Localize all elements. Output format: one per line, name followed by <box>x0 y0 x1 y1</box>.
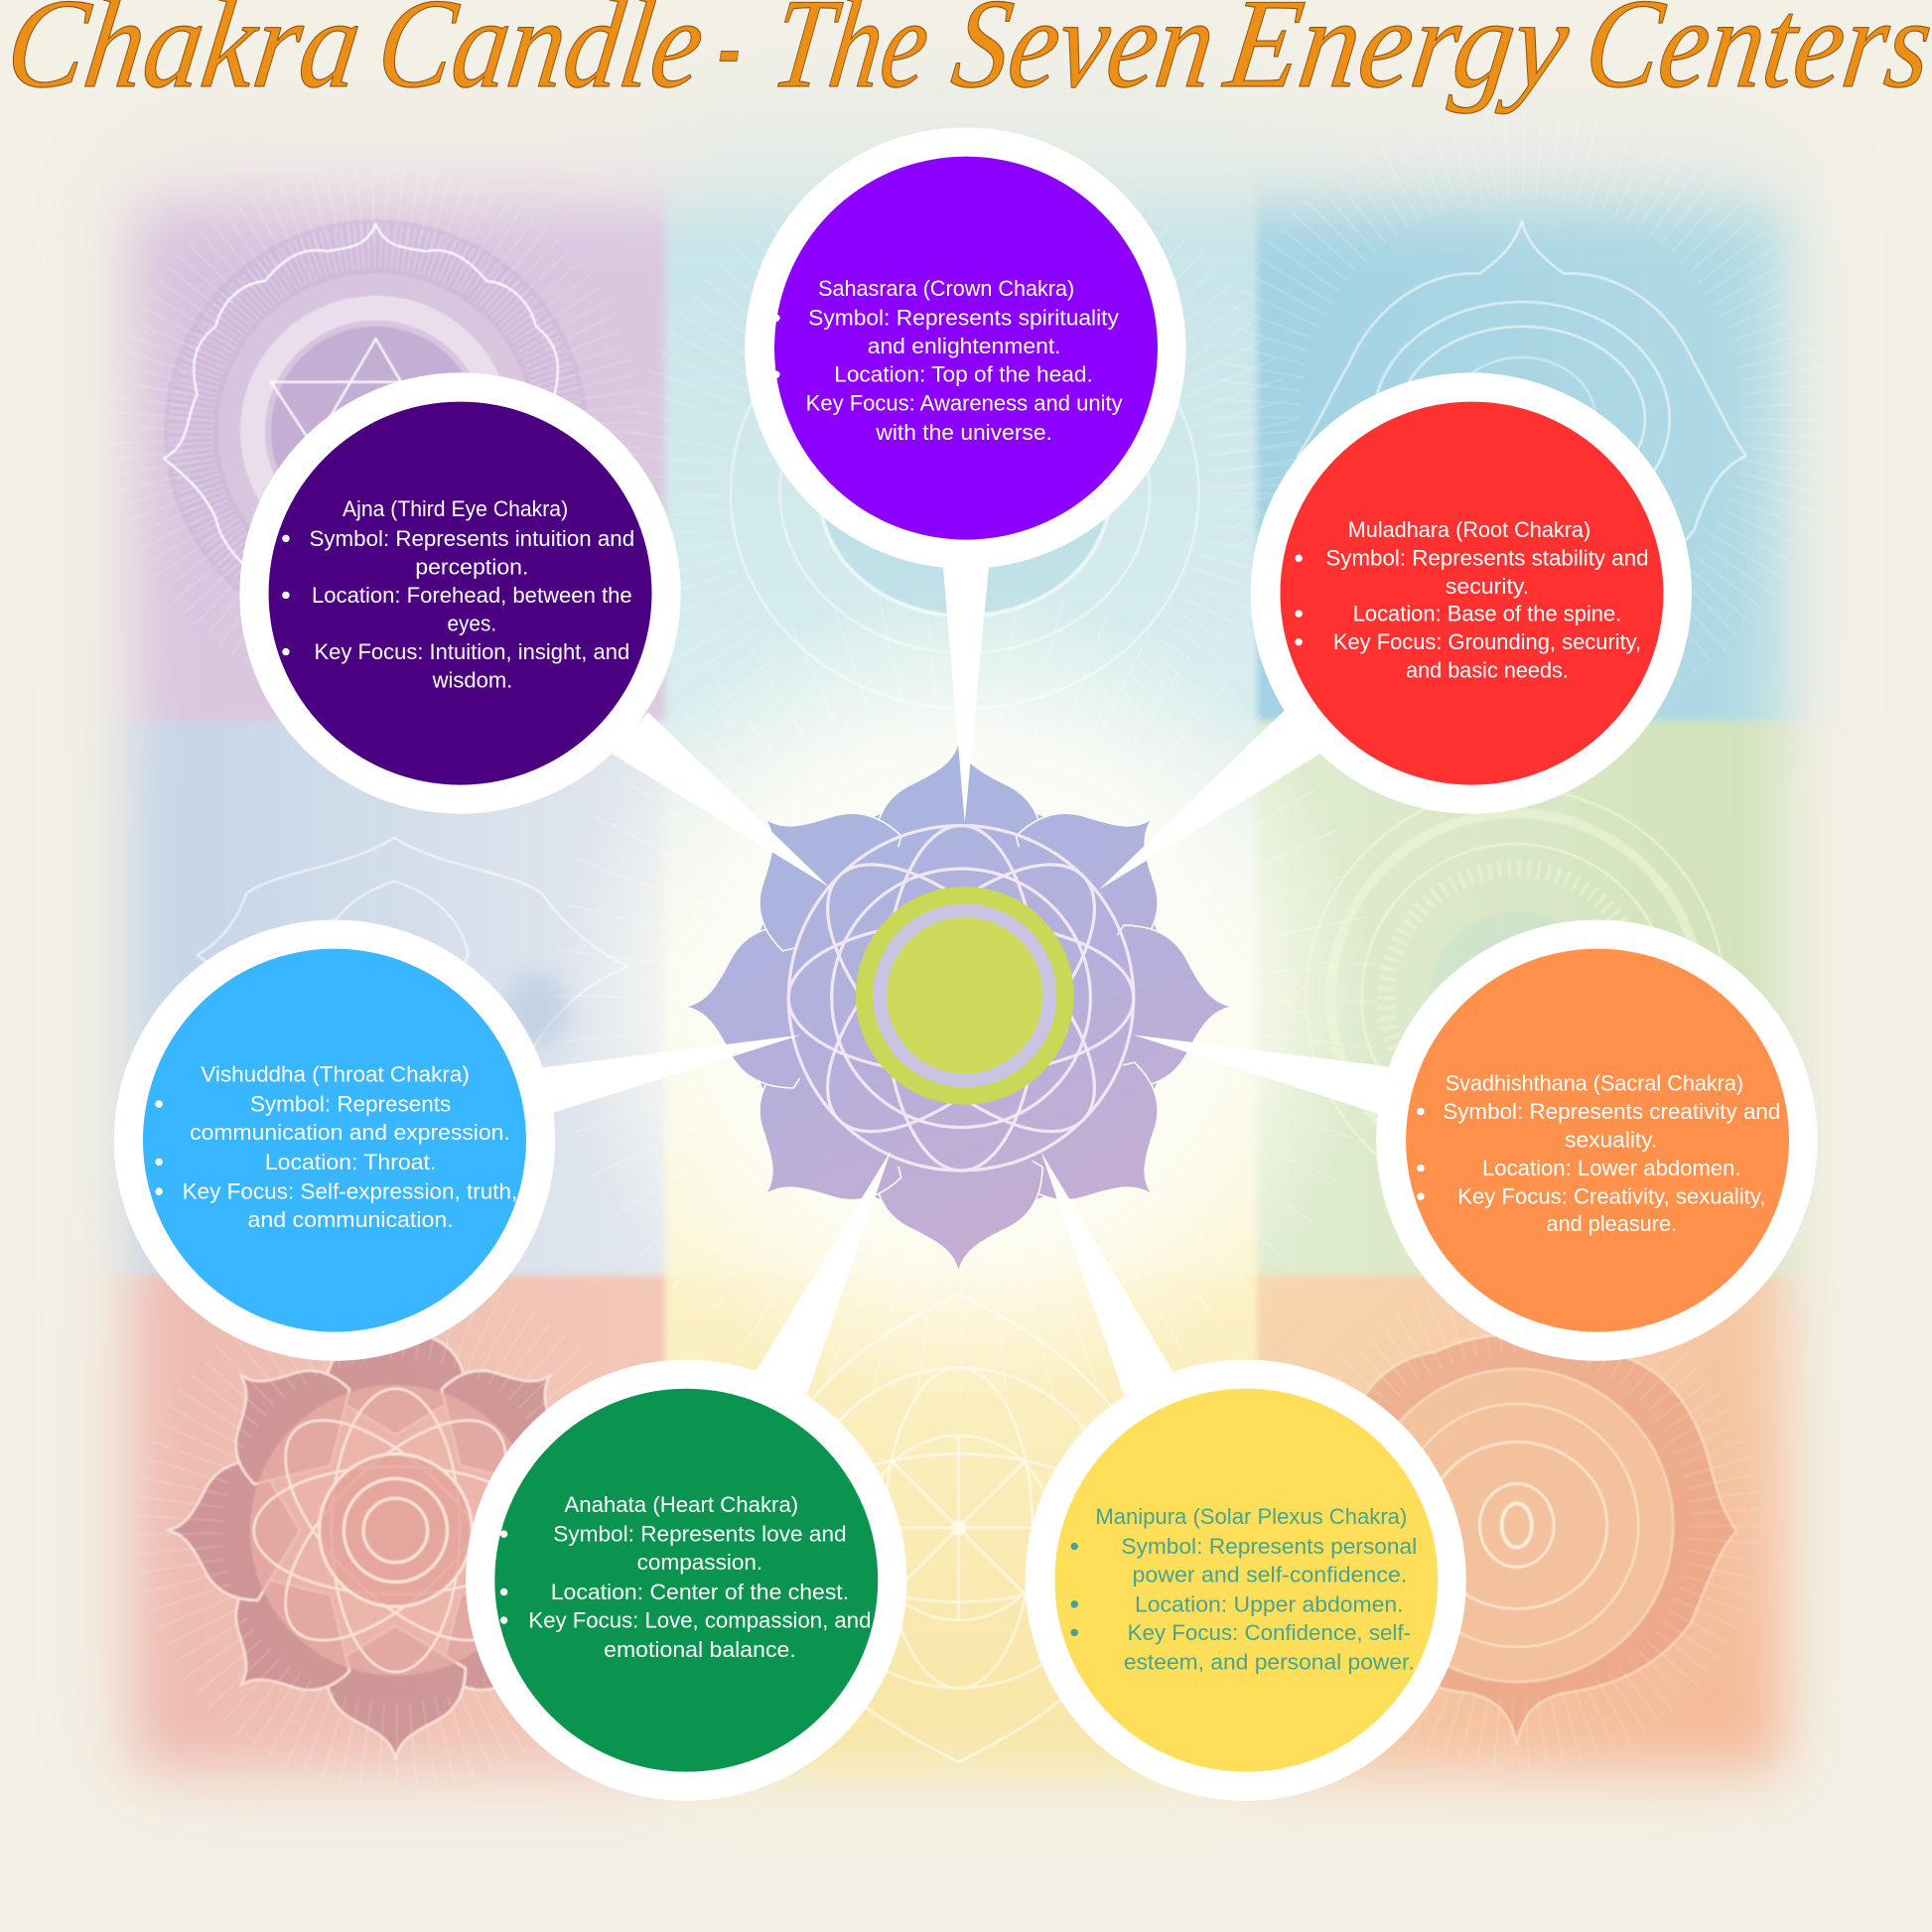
background: soft colour bleed <box>136 111 1774 1768</box>
pointer <box>537 1035 801 1114</box>
text: Location: Base of the spine. <box>1353 601 1621 625</box>
text <box>1443 1070 1780 1236</box>
text: Muladhara (Root Chakra) <box>1348 517 1590 542</box>
bullets <box>772 314 780 378</box>
text: and basic needs. <box>1406 658 1569 683</box>
disc <box>494 1389 878 1772</box>
white border <box>1251 372 1692 814</box>
text: emotional balance. <box>604 1637 796 1662</box>
background mandala: third eye, top left <box>148 204 604 659</box>
disc <box>1406 949 1789 1332</box>
text: Location: Upper abdomen. <box>1135 1591 1404 1616</box>
bullets <box>282 535 290 655</box>
callout: Ajna third eye chakra <box>239 372 829 888</box>
background mandala: sacral, middle right <box>1282 788 1725 1207</box>
text <box>528 1492 871 1662</box>
text: and enlightenment. <box>868 334 1061 358</box>
text <box>806 276 1123 445</box>
text: Location: Forehead, between the <box>312 583 632 608</box>
title <box>0 0 1932 115</box>
text: wisdom. <box>432 668 512 693</box>
text: Location: Lower abdomen. <box>1482 1156 1741 1180</box>
text: Key Focus: Love, compassion, and <box>528 1607 871 1632</box>
text <box>310 496 634 693</box>
text: eyes. <box>448 611 496 635</box>
text: Symbol: Represents intuition and <box>310 526 634 551</box>
callout: Sahasrara crown chakra <box>745 127 1186 823</box>
pointer <box>1041 1152 1174 1395</box>
text: Key Focus: Creativity, sexuality, <box>1457 1184 1765 1209</box>
lotus pale centre <box>869 899 1061 1092</box>
background mandala: root, top right <box>1257 154 1787 684</box>
central lotus flower <box>688 745 1229 1269</box>
text: Symbol: Represents stability and <box>1325 546 1649 571</box>
callout: Anahata heart chakra <box>466 1151 906 1801</box>
bullets <box>1417 1108 1425 1200</box>
background: central glow <box>558 589 1371 1402</box>
background mandala: crown, top middle <box>675 204 1254 782</box>
callout: Muladhara root chakra <box>1099 372 1692 890</box>
white border <box>1026 1360 1466 1801</box>
pointer <box>755 1151 891 1395</box>
background: rays around lotus <box>620 655 1310 1345</box>
disc <box>269 402 652 785</box>
background mandala: throat, middle left <box>198 838 628 1053</box>
bullets <box>1295 554 1303 645</box>
disc <box>1280 402 1663 785</box>
white border <box>114 919 555 1361</box>
pointer <box>1134 1035 1392 1115</box>
text: compassion. <box>637 1550 762 1575</box>
text <box>183 1062 517 1232</box>
text: Symbol: Represents personal <box>1121 1534 1417 1559</box>
text: Location: Throat. <box>265 1150 436 1174</box>
text: power and self-confidence. <box>1133 1563 1407 1587</box>
disc <box>143 949 526 1332</box>
text: Location: Center of the chest. <box>551 1580 849 1604</box>
text: Symbol: Represents creativity and <box>1443 1099 1780 1124</box>
text: Key Focus: Intuition, insight, and <box>314 639 629 664</box>
text: with the universe. <box>875 420 1052 445</box>
text: Symbol: Represents <box>250 1091 451 1116</box>
text: Key Focus: Self-expression, truth, <box>183 1179 517 1204</box>
text: security. <box>1446 574 1529 599</box>
background mandala: heart, bottom left <box>167 1302 624 1759</box>
lotus petals <box>688 745 1229 1269</box>
text: Svadhishthana (Sacral Chakra) <box>1446 1070 1743 1095</box>
text: Vishuddha (Throat Chakra) <box>201 1062 470 1087</box>
text <box>1095 1504 1417 1675</box>
background mandala: solar plexus, bottom middle <box>773 1294 1144 1762</box>
bullets <box>1070 1543 1078 1636</box>
text: Key Focus: Grounding, security, <box>1333 629 1641 654</box>
text: Sahasrara (Crown Chakra) <box>818 276 1074 301</box>
callout: Svadhishthana sacral chakra <box>1134 919 1818 1361</box>
callout: Manipura solar plexus chakra <box>1026 1152 1466 1801</box>
bullets <box>500 1530 507 1624</box>
white border <box>239 372 681 814</box>
background mandala: rose, bottom right <box>1309 1316 1736 1745</box>
text: Symbol: Represents love and <box>553 1522 847 1547</box>
pointer <box>613 712 829 888</box>
disc <box>887 917 1043 1074</box>
disc <box>774 157 1158 540</box>
text: Ajna (Third Eye Chakra) <box>343 496 568 521</box>
callout: Vishuddha throat chakra <box>114 919 801 1361</box>
text: Key Focus: Confidence, self- <box>1128 1620 1411 1645</box>
pointer <box>1099 710 1319 890</box>
center disc with ring <box>865 896 1065 1096</box>
text: Symbol: Represents spirituality <box>808 306 1120 331</box>
white border <box>745 127 1186 569</box>
disc <box>1054 1389 1438 1772</box>
text: sexuality. <box>1565 1127 1657 1152</box>
text <box>1325 517 1649 683</box>
text: Location: Top of the head. <box>834 362 1093 387</box>
text: perception. <box>415 554 528 579</box>
white border <box>466 1360 906 1801</box>
text: and communication. <box>247 1207 454 1232</box>
bullets <box>155 1100 163 1195</box>
pointer <box>942 561 990 823</box>
text: communication and expression. <box>190 1120 510 1145</box>
white border <box>1376 919 1818 1361</box>
text: esteem, and personal power. <box>1124 1650 1415 1675</box>
lotus white line work <box>785 822 1137 1174</box>
background: nine chakra colour panels <box>73 148 1849 1830</box>
ring <box>865 896 1065 1096</box>
text: and pleasure. <box>1547 1211 1677 1236</box>
text: Key Focus: Awareness and unity <box>806 390 1123 415</box>
text: Anahata (Heart Chakra) <box>564 1492 798 1517</box>
text: Manipura (Solar Plexus Chakra) <box>1095 1504 1407 1529</box>
